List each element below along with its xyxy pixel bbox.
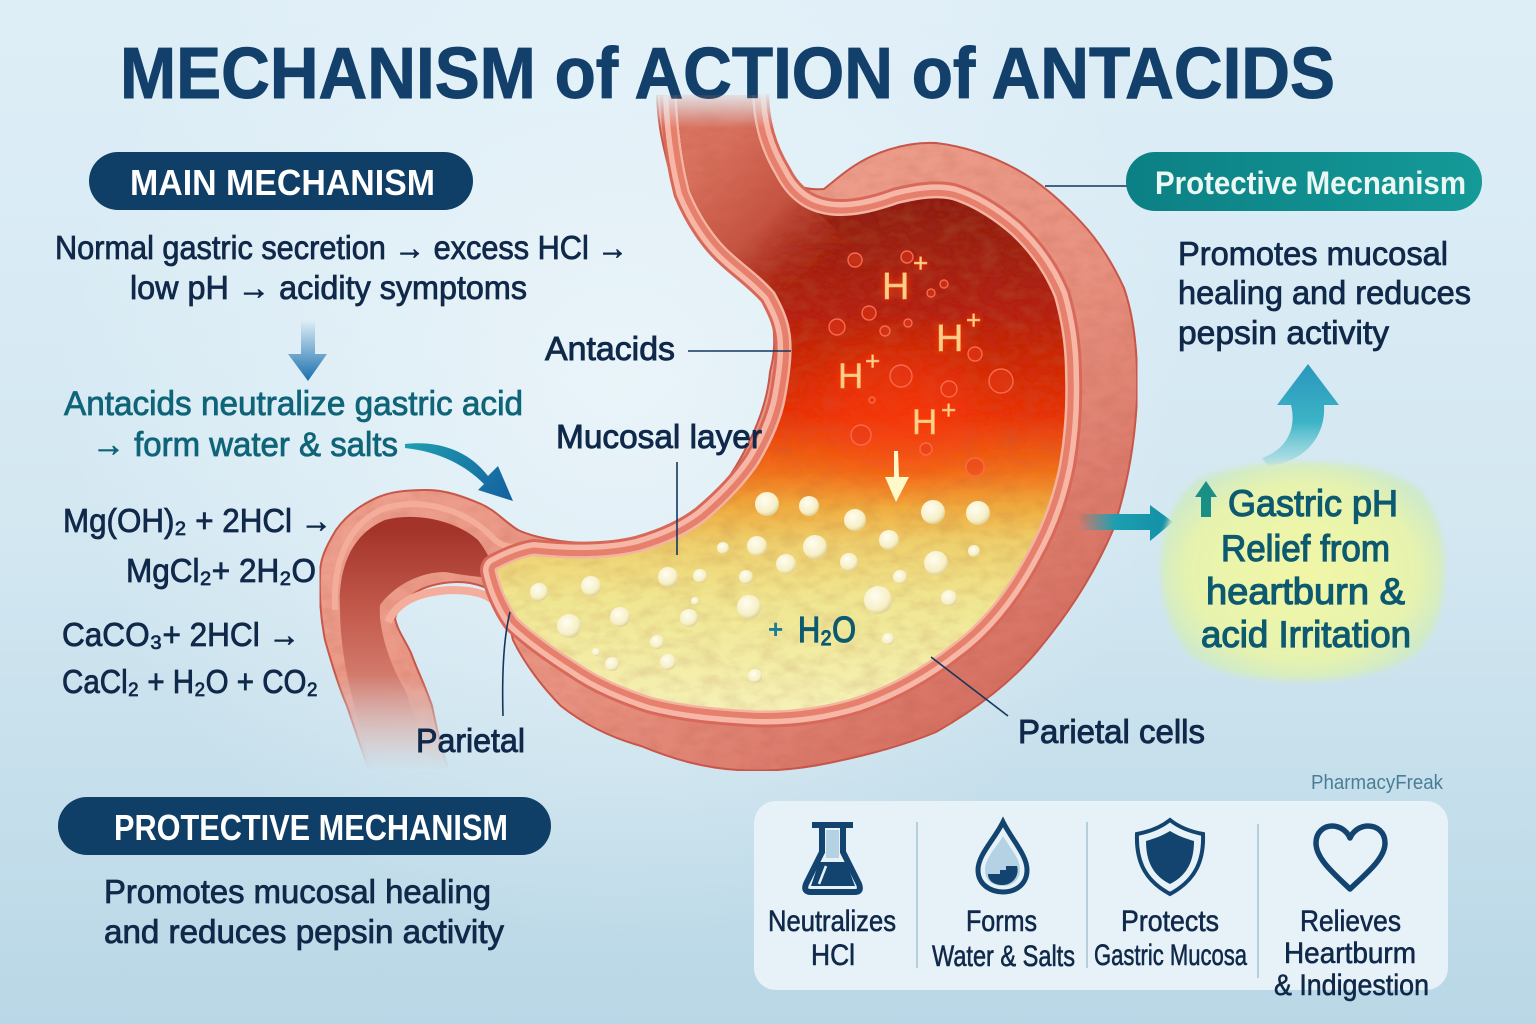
panel: relief blob: Gastric pH	[1228, 483, 1398, 524]
pill: protective mechanism left: PROTECTIVE MECHANISM	[114, 807, 508, 848]
text: antacids neutralize: Antacids neutralize gastric acid	[64, 385, 523, 423]
text: normal secretion: low pH → acidity symptoms	[130, 269, 527, 306]
water label in stomach	[768, 609, 856, 650]
pill: protective mechanism left	[58, 797, 551, 855]
hydrogen ions: +	[941, 395, 956, 425]
equations: CaCl₂ + H₂O + CO₂	[62, 663, 318, 700]
text: promotes healing right: pepsin activity	[1178, 314, 1390, 351]
stomach lumen: acid to neutralized gradient	[497, 95, 1065, 710]
equations: CaCO₃+ 2HCl →	[62, 616, 300, 653]
label: parietal: Parietal	[416, 722, 525, 759]
hydrogen ions: +	[913, 248, 928, 278]
caption: relieves: Relieves	[1300, 905, 1401, 938]
caption: neutralizes: Neutralizes	[768, 905, 896, 938]
pill: protective mechanism right	[1045, 152, 1482, 211]
caption: relieves: Heartburm	[1284, 937, 1416, 970]
text: promotes healing right: Promotes mucosal	[1178, 235, 1448, 272]
equations: Mg(OH)₂ + 2HCl →	[63, 502, 332, 539]
arrow: curved up	[1262, 364, 1339, 466]
caption: relieves	[1274, 905, 1429, 1002]
acid bubbles	[829, 251, 1013, 476]
arrow: right to relief	[1078, 505, 1173, 541]
text: normal secretion: Normal gastric secretion → excess HCl →	[55, 229, 628, 266]
acid glow	[820, 350, 980, 470]
text: normal secretion	[55, 229, 628, 306]
duodenum interior	[340, 516, 488, 717]
panel: relief blob	[1161, 462, 1444, 681]
equations: MgCl₂+ 2H₂O	[126, 552, 316, 589]
title: MECHANISM of ACTION of ANTACIDS	[120, 34, 1335, 114]
downward arrow	[885, 451, 909, 502]
label: parietal cells	[931, 657, 1205, 750]
icon: heart	[1316, 826, 1385, 889]
text: promotes healing right: healing and reduces	[1178, 274, 1471, 311]
stomach outer wall	[320, 95, 1137, 771]
stomach illustration	[320, 95, 1137, 771]
text: antacids neutralize: → form water & salts	[92, 426, 398, 464]
label: parietal cells: Parietal cells	[1018, 713, 1205, 750]
equations	[62, 502, 332, 700]
panel: relief blob: heartburn &	[1206, 571, 1405, 612]
caption: protects: Protects	[1121, 905, 1219, 938]
panel: relief blob: Relief from	[1221, 528, 1390, 569]
arrow: down	[288, 320, 327, 381]
hydrogen ions: +	[966, 305, 981, 335]
icon: up arrow	[1195, 481, 1217, 517]
caption: forms: Forms	[966, 905, 1037, 938]
pill: main mechanism: MAIN MECHANISM	[130, 162, 435, 203]
text: promotes healing right	[1178, 235, 1471, 351]
panel: relief blob: acid Irritation	[1201, 614, 1411, 655]
label: mucosal layer: Mucosal layer	[556, 418, 762, 455]
caption: protects	[1094, 905, 1247, 972]
text: promotes healing left: and reduces pepsin activity	[104, 913, 505, 950]
caption: forms	[932, 905, 1075, 973]
arrow: curved to stomach	[405, 443, 513, 501]
icon: flask	[805, 822, 860, 892]
label: parietal	[416, 612, 525, 759]
pill: protective mechanism right: Protective Mecnanism	[1155, 165, 1466, 201]
hydrogen ions: H	[912, 403, 937, 442]
label: antacids: Antacids	[545, 330, 675, 367]
caption: forms: Water & Salts	[932, 940, 1075, 973]
mucosal bands	[497, 95, 1065, 710]
text: antacids neutralize	[64, 385, 523, 464]
hydrogen ions: +	[865, 346, 880, 376]
water label in stomach: H₂O	[798, 609, 856, 650]
hydrogen ions: H	[882, 266, 909, 308]
antacid bubbles	[530, 492, 990, 683]
caption: neutralizes	[768, 905, 896, 972]
caption: neutralizes: HCl	[811, 939, 855, 972]
text: promotes healing left: Promotes mucosal healing	[104, 873, 491, 910]
text: promotes healing left	[104, 873, 505, 950]
caption: relieves: & Indigestion	[1274, 969, 1429, 1002]
panel: benefits	[754, 801, 1448, 1002]
icon: shield	[1137, 820, 1203, 894]
hydrogen ions	[838, 248, 981, 442]
hydrogen ions: H	[936, 318, 963, 360]
hydrogen ions: H	[838, 357, 863, 396]
water label in stomach: +	[768, 614, 783, 644]
icon: drop	[978, 822, 1027, 892]
caption: protects: Gastric Mucosa	[1094, 939, 1247, 972]
pill: main mechanism	[89, 152, 473, 210]
watermark: PharmacyFreak	[1311, 772, 1444, 794]
duodenum wall bands	[335, 504, 520, 610]
esophagus interior	[677, 95, 844, 292]
